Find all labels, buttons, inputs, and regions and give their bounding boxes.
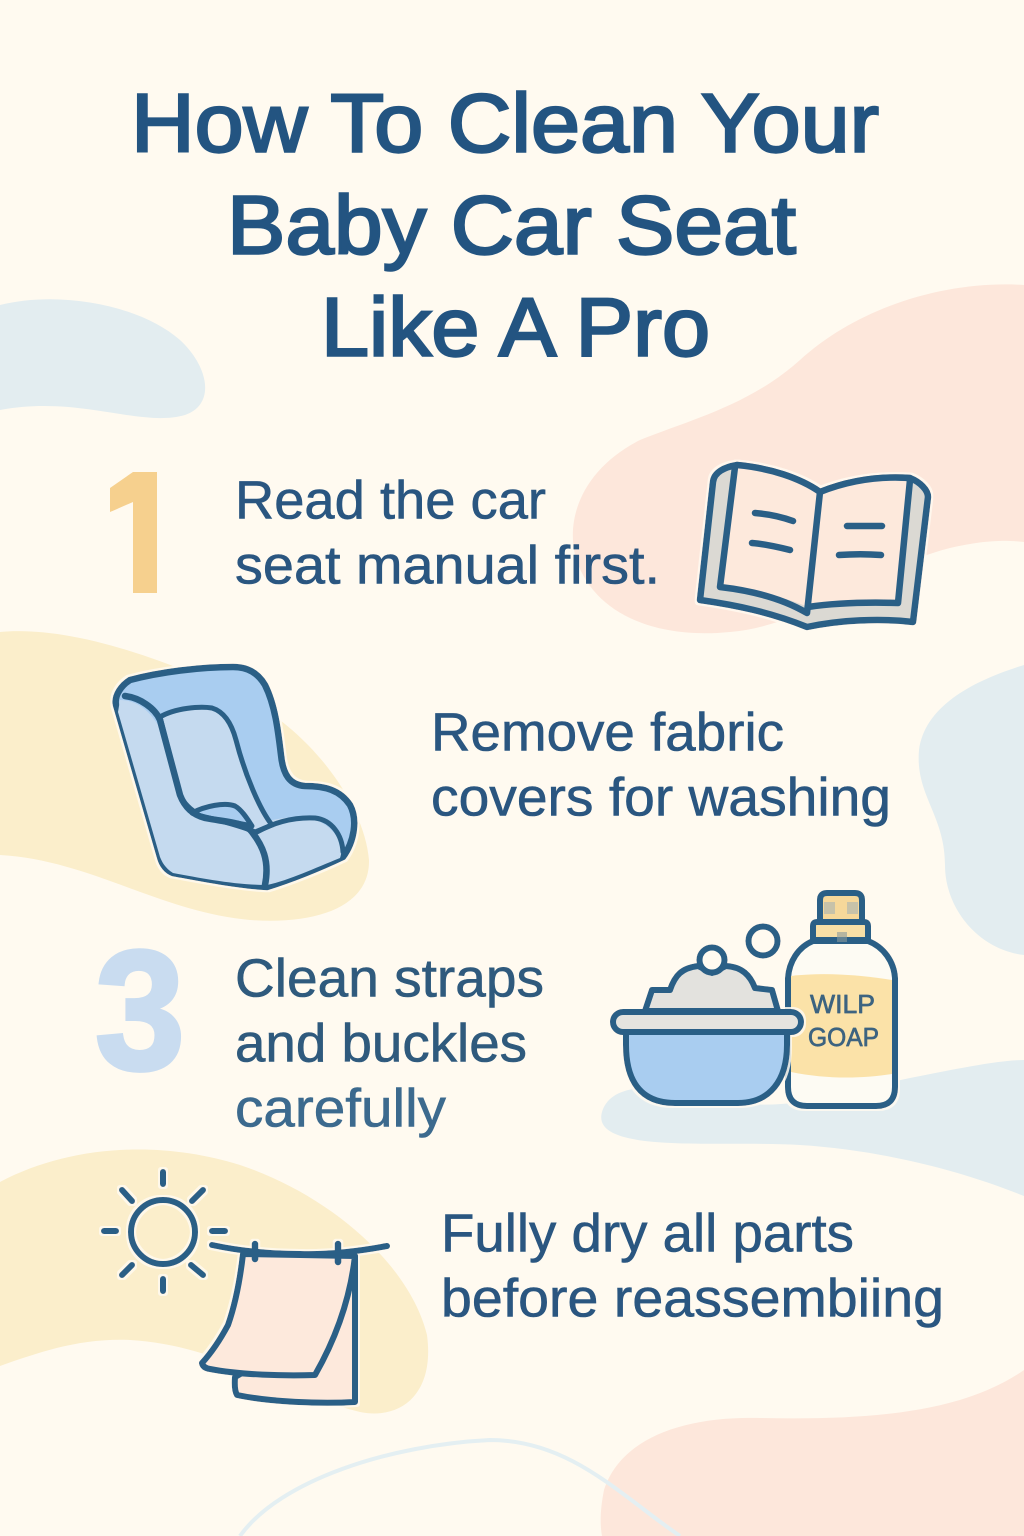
icon: towel on clothesline	[202, 1244, 387, 1403]
title: Baby Car Seat	[227, 178, 796, 272]
step 2 text: Remove fabric	[431, 702, 784, 762]
step 3 text: and buckles	[235, 1014, 527, 1074]
step 4 text: before reassembiing	[441, 1268, 944, 1328]
step 1 text	[235, 470, 660, 596]
step 3 text: carefully	[235, 1078, 446, 1138]
step 2 text	[431, 702, 891, 828]
icon: soap bottle	[788, 893, 895, 1106]
step 4 text: Fully dry all parts	[441, 1204, 854, 1264]
bottle label text: GOAP	[808, 1022, 879, 1052]
title	[131, 76, 879, 374]
title: How To Clean Your	[131, 76, 879, 170]
icon: sun	[104, 1172, 225, 1291]
step 3 text: Clean straps	[235, 948, 544, 1008]
title: Like A Pro	[321, 280, 710, 374]
bottle label text: WILP	[810, 989, 875, 1019]
step 1 number: 1	[102, 434, 182, 640]
icon: open book	[700, 465, 928, 627]
step 3 text	[235, 948, 544, 1138]
icon: car seat	[116, 667, 354, 887]
icon: wash basin with bubbles	[613, 926, 801, 1103]
step 1 text: seat manual first.	[235, 536, 660, 596]
step 4 text	[441, 1204, 944, 1328]
step 2 text: covers for washing	[431, 768, 891, 828]
bottle label text	[808, 989, 879, 1052]
step 3 number: 3	[95, 916, 185, 1106]
step 1 text: Read the car	[235, 470, 546, 530]
